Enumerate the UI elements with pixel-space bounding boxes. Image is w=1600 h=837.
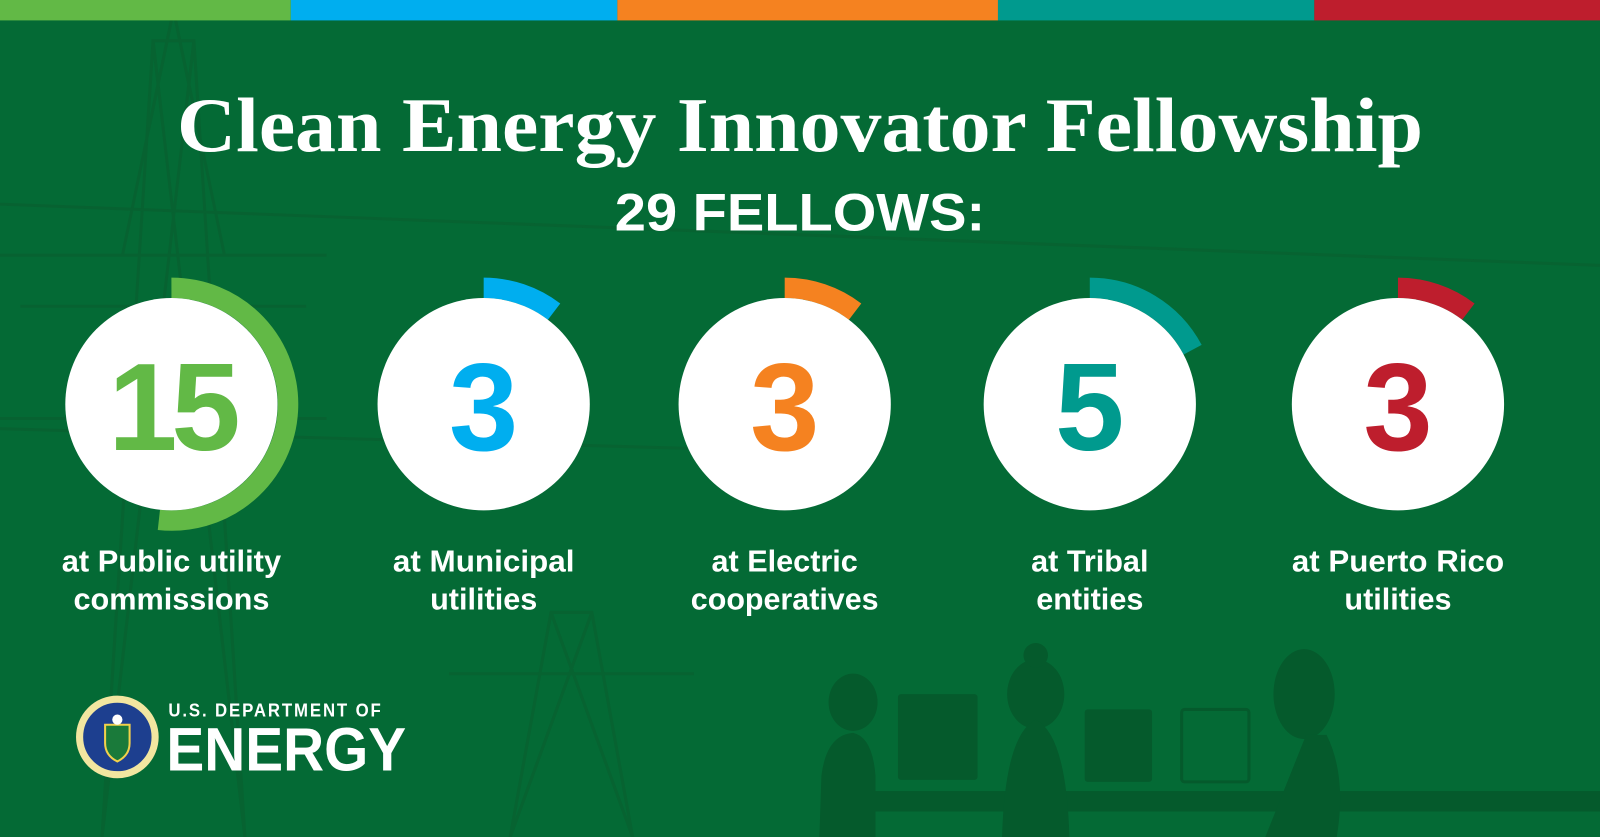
background: office people silhouettes bbox=[819, 643, 1600, 837]
stat: public utility commissions: 15 bbox=[108, 338, 237, 477]
logo: DOE: U.S. DEPARTMENT OF bbox=[168, 700, 383, 721]
stat: municipal utilities: utilities bbox=[430, 582, 537, 616]
stat: tribal entities: 5 bbox=[1055, 338, 1124, 477]
subtitle: 29 FELLOWS: bbox=[615, 184, 985, 243]
stat: electric cooperatives: 3 bbox=[750, 338, 819, 477]
stat: tribal entities bbox=[984, 288, 1196, 616]
stat: public utility commissions: at Public utility bbox=[62, 545, 281, 579]
stat: municipal utilities: 3 bbox=[449, 338, 518, 477]
stat: puerto rico utilities: 3 bbox=[1363, 338, 1433, 477]
logo: DOE: ENERGY bbox=[166, 716, 406, 784]
stat: puerto rico utilities: utilities bbox=[1344, 582, 1452, 616]
top color bar bbox=[0, 0, 1600, 20]
stat: puerto rico utilities: at Puerto Rico bbox=[1292, 545, 1504, 579]
stat: municipal utilities bbox=[378, 288, 590, 616]
icon: DOE seal bbox=[77, 696, 158, 778]
stat: public utility commissions: commissions bbox=[73, 582, 269, 616]
stat: tribal entities: at Tribal bbox=[1031, 545, 1148, 579]
title: Clean Energy Innovator Fellowship bbox=[177, 82, 1423, 168]
stat: electric cooperatives: cooperatives bbox=[691, 582, 879, 616]
stat: electric cooperatives bbox=[679, 288, 891, 616]
stat: public utility commissions bbox=[62, 288, 288, 616]
stat: tribal entities: entities bbox=[1036, 582, 1143, 616]
logo: DOE bbox=[77, 696, 406, 784]
stat: electric cooperatives: at Electric bbox=[712, 545, 858, 579]
stat: puerto rico utilities bbox=[1292, 288, 1504, 616]
stat: municipal utilities: at Municipal bbox=[393, 545, 574, 579]
